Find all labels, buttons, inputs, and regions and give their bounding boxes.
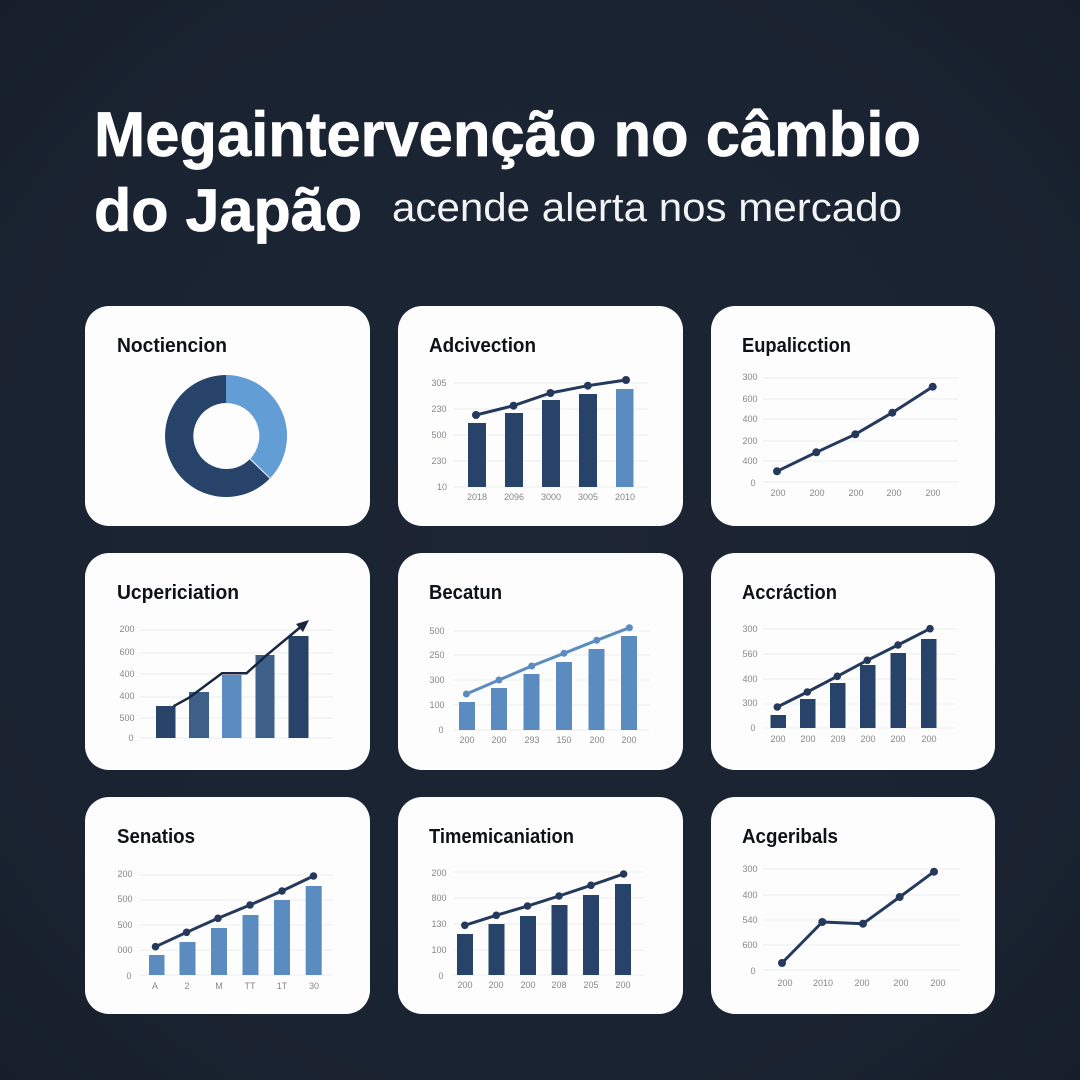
- combo chart: bars and line: 2096: [504, 492, 524, 502]
- title: do Japão: [94, 177, 362, 244]
- bar chart with trend arrow: 600: [119, 647, 135, 657]
- combo chart: bars and line: [431, 868, 644, 990]
- line chart: 400: [742, 414, 758, 424]
- combo chart: bars and line: 2010: [615, 492, 635, 502]
- panel: Accráction: [711, 553, 995, 770]
- line chart: [742, 864, 960, 988]
- combo chart: bars and line: 150: [556, 735, 572, 745]
- panel: Noctiencion donut: [85, 306, 370, 526]
- line chart: 200: [809, 488, 825, 498]
- combo chart: bars and line: 0: [438, 725, 444, 735]
- bar chart with trend arrow: 200: [119, 624, 135, 634]
- panel: Acgeribals: [711, 797, 995, 1014]
- combo chart: bars and line: 200: [520, 980, 536, 990]
- line chart: 300: [742, 864, 758, 874]
- combo chart: bars and line: 200: [615, 980, 631, 990]
- combo chart: bars and line: 0: [438, 971, 444, 981]
- line chart: 600: [742, 394, 758, 404]
- line chart: 400: [742, 890, 758, 900]
- combo chart: bars and line: [431, 376, 648, 502]
- panel: Becatun: [398, 553, 683, 770]
- title: [94, 100, 921, 244]
- combo chart: bars and line: 250: [429, 650, 445, 660]
- combo chart: bars and line: 209: [830, 734, 846, 744]
- line chart: 200: [893, 978, 909, 988]
- line chart: 2010: [813, 978, 833, 988]
- combo chart: bars and line: A: [152, 981, 158, 991]
- combo chart: bars and line: 3000: [541, 492, 561, 502]
- bar chart with trend arrow: 400: [119, 669, 135, 679]
- panel heading: Timemicaniation: [429, 826, 574, 848]
- combo chart: bars and line: 200: [459, 735, 475, 745]
- combo chart: bars and line: 200: [621, 735, 637, 745]
- combo chart: bars and line: [117, 869, 333, 991]
- line chart: 200: [742, 436, 758, 446]
- combo chart: bars and line: 230: [431, 404, 447, 414]
- combo chart: bars and line: 200: [117, 869, 133, 879]
- combo chart: bars and line: 2: [184, 981, 190, 991]
- combo chart: bars and line: 200: [457, 980, 473, 990]
- panel heading: Senatios: [117, 826, 195, 848]
- panel heading: Adcivection: [429, 335, 536, 357]
- line chart: 540: [742, 915, 758, 925]
- line chart: 0: [750, 966, 756, 976]
- combo chart: bars and line: 400: [742, 674, 758, 684]
- combo chart: bars and line: 100: [431, 945, 447, 955]
- line chart: 200: [925, 488, 941, 498]
- panel: Senatios: [85, 797, 370, 1014]
- combo chart: bars and line: 130: [431, 919, 447, 929]
- combo chart: bars and line: 200: [431, 868, 447, 878]
- combo chart: bars and line: 10: [437, 482, 447, 492]
- panel: Eupalicction: [711, 306, 995, 526]
- panel heading: Ucpericiation: [117, 582, 239, 604]
- combo chart: bars and line: 000: [117, 945, 133, 955]
- line chart: 200: [886, 488, 902, 498]
- combo chart: bars and line: 3005: [578, 492, 598, 502]
- combo chart: bars and line: TT: [244, 981, 256, 991]
- panel: Ucpericiation: [85, 553, 370, 770]
- combo chart: bars and line: [429, 624, 650, 745]
- combo chart: bars and line: 200: [890, 734, 906, 744]
- combo chart: bars and line: 200: [488, 980, 504, 990]
- bar chart with trend arrow: [119, 620, 333, 743]
- combo chart: bars and line: 2018: [467, 492, 487, 502]
- combo chart: bars and line: 200: [589, 735, 605, 745]
- combo chart: bars and line: 100: [429, 700, 445, 710]
- panel heading: Acgeribals: [742, 826, 838, 848]
- donut chart: [165, 375, 287, 497]
- bar chart with trend arrow: 500: [119, 713, 135, 723]
- combo chart: bars and line: 1T: [277, 981, 288, 991]
- combo chart: bars and line: 200: [860, 734, 876, 744]
- line chart: 300: [742, 372, 758, 382]
- line chart: 0: [750, 478, 756, 488]
- combo chart: bars and line: 560: [742, 649, 758, 659]
- combo chart: bars and line: M: [215, 981, 223, 991]
- combo chart: bars and line: 500: [431, 430, 447, 440]
- combo chart: bars and line: 205: [583, 980, 599, 990]
- combo chart: bars and line: 208: [551, 980, 567, 990]
- combo chart: bars and line: 30: [309, 981, 319, 991]
- line chart: 600: [742, 940, 758, 950]
- panel heading: Accráction: [742, 582, 837, 604]
- combo chart: bars and line: 305: [431, 378, 447, 388]
- panel heading: Becatun: [429, 582, 502, 604]
- title: acende alerta nos mercado: [392, 186, 902, 230]
- line chart: 200: [770, 488, 786, 498]
- panel heading: Eupalicction: [742, 335, 851, 357]
- bar chart with trend arrow: 0: [128, 733, 134, 743]
- combo chart: bars and line: 500: [117, 894, 133, 904]
- combo chart: bars and line: 300: [742, 698, 758, 708]
- bar chart with trend arrow: 400: [119, 691, 135, 701]
- combo chart: bars and line: [742, 624, 956, 744]
- combo chart: bars and line: 800: [431, 893, 447, 903]
- combo chart: bars and line: 500: [429, 626, 445, 636]
- combo chart: bars and line: 300: [742, 624, 758, 634]
- line chart: 200: [848, 488, 864, 498]
- combo chart: bars and line: 0: [126, 971, 132, 981]
- line chart: 200: [930, 978, 946, 988]
- combo chart: bars and line: 230: [431, 456, 447, 466]
- combo chart: bars and line: 293: [524, 735, 540, 745]
- line chart: 200: [854, 978, 870, 988]
- line chart: 200: [777, 978, 793, 988]
- panel heading: Noctiencion: [117, 335, 227, 357]
- line chart: [742, 372, 958, 498]
- panel: Timemicaniation: [398, 797, 683, 1014]
- combo chart: bars and line: 200: [770, 734, 786, 744]
- combo chart: bars and line: 300: [429, 675, 445, 685]
- combo chart: bars and line: 200: [491, 735, 507, 745]
- line chart: 400: [742, 456, 758, 466]
- panel: Adcivection: [398, 306, 683, 526]
- combo chart: bars and line: 200: [921, 734, 937, 744]
- title: Megaintervenção no câmbio: [94, 100, 921, 170]
- combo chart: bars and line: 200: [800, 734, 816, 744]
- combo chart: bars and line: 500: [117, 920, 133, 930]
- combo chart: bars and line: 0: [750, 723, 756, 733]
